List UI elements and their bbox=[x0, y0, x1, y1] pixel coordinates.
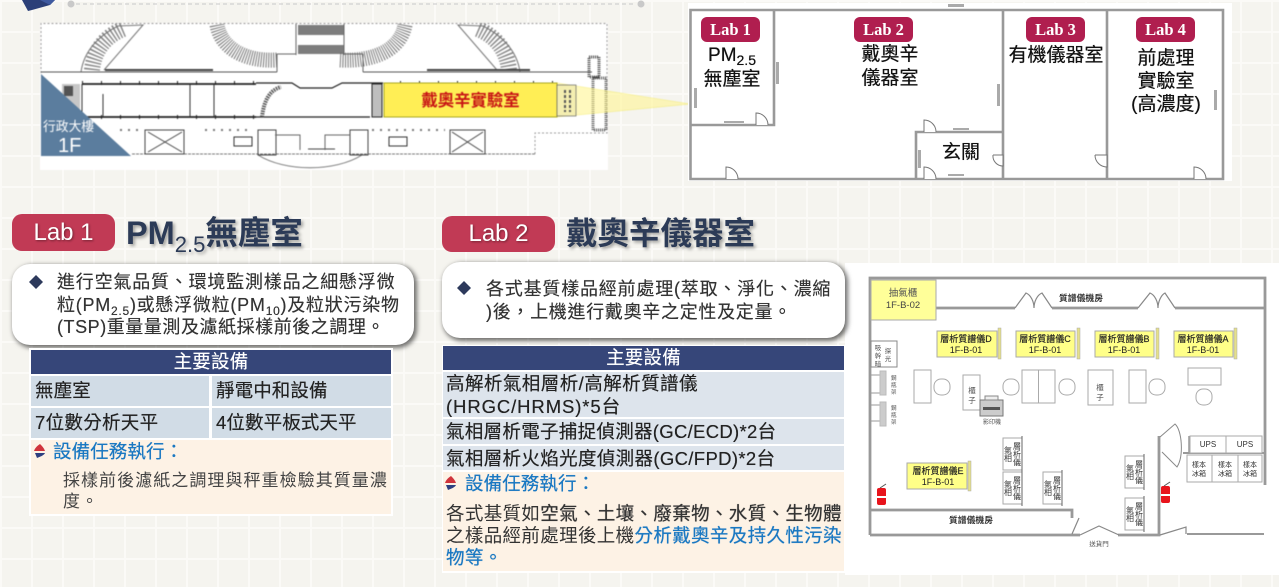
small furniture labels: 光 bbox=[885, 354, 892, 363]
sample freezers: 樣本 bbox=[1218, 460, 1232, 469]
gas chromatographs bbox=[1003, 436, 1144, 532]
lab 4 tag: Lab 4 bbox=[1145, 20, 1186, 39]
lab 1 badge: Lab 1 bbox=[33, 219, 94, 246]
sample freezers: 冰箱 bbox=[1243, 469, 1257, 478]
small furniture labels: 架 bbox=[891, 419, 897, 426]
lab 1 equipment table bbox=[29, 348, 393, 516]
printer bbox=[980, 396, 1003, 416]
task heading: 設備任務執行： bbox=[465, 473, 595, 494]
floor tag triangle: 1F bbox=[58, 135, 81, 157]
lab 1 tag: Lab 1 bbox=[710, 20, 751, 39]
small furniture labels: 子 bbox=[968, 396, 976, 405]
instrument A: 層析質譜儀A bbox=[1177, 333, 1229, 344]
task line 2: 之樣品經前處理後上機分析戴奧辛及持久性污染 bbox=[446, 525, 842, 546]
lab 1 name: PM2.5 bbox=[708, 45, 756, 68]
description line 1: 進行空氣品質、環境監測樣品之細懸浮微 bbox=[57, 272, 395, 292]
instrument E bbox=[907, 461, 971, 491]
decorative corner logo bbox=[22, 0, 55, 11]
gas chromatograph labels: 層析儀 bbox=[1052, 476, 1062, 500]
dioxin lab highlight bbox=[384, 83, 690, 117]
cell bbox=[212, 376, 391, 406]
machine room label top: 質譜儀機房 bbox=[1059, 292, 1103, 303]
small furniture labels: 幹 bbox=[875, 351, 882, 360]
lab 4 tag bbox=[1136, 17, 1195, 42]
lab 2 name bbox=[861, 44, 918, 89]
equipment row 1 bbox=[443, 372, 844, 417]
task line 1: 各式基質如空氣、土壤、廢棄物、水質、生物體 bbox=[446, 503, 842, 524]
small furniture labels: 吸 bbox=[875, 344, 882, 352]
instrument C bbox=[1016, 328, 1080, 359]
UPS units: UPS bbox=[1237, 440, 1253, 449]
gas chromatograph labels: 層析儀 bbox=[1012, 476, 1022, 500]
table header: 主要設備 bbox=[606, 347, 681, 368]
small furniture labels: 影印機 bbox=[983, 418, 1001, 426]
sample freezers bbox=[1187, 455, 1262, 482]
lab layout overview plan bbox=[688, 3, 1232, 181]
lab 1 badge bbox=[12, 214, 115, 251]
gas chromatograph labels: 氣相 bbox=[1126, 463, 1134, 481]
fume hood: 抽氣櫃 bbox=[889, 287, 918, 299]
bullet bbox=[29, 275, 43, 289]
equipment row 1: 高解析氣相層析/高解析質譜儀 bbox=[446, 373, 698, 394]
dioxin instrument room floor plan bbox=[845, 263, 1279, 575]
lab 4 name: (高濃度) bbox=[1131, 94, 1201, 115]
cell: 4位數平板式天平 bbox=[216, 412, 357, 433]
lab 2 badge bbox=[442, 216, 555, 252]
small furniture labels: 櫃 bbox=[1096, 382, 1104, 392]
lab 1 tag bbox=[701, 17, 760, 42]
gas chromatograph labels bbox=[1004, 442, 1144, 526]
lab 1 description bbox=[12, 264, 414, 345]
small furniture labels: 子 bbox=[1096, 393, 1104, 402]
section: lab 2 bbox=[440, 215, 852, 573]
small furniture labels: 瓶 bbox=[891, 381, 897, 389]
gas chromatograph labels: 氣相 bbox=[1126, 505, 1134, 523]
task text end: 度。 bbox=[63, 492, 99, 511]
description line 3: (TSP)重量量測及濾紙採樣前後之調理。 bbox=[57, 317, 385, 337]
top dotted rule bbox=[68, 0, 644, 8]
description line 1: 各式基質樣品經前處理(萃取、淨化、濃縮 bbox=[486, 279, 831, 299]
table header: 主要設備 bbox=[174, 351, 248, 372]
sample freezers: 冰箱 bbox=[1192, 469, 1206, 478]
lab 2 name: 戴奧辛 bbox=[861, 44, 918, 65]
small furniture labels: 瓶 bbox=[891, 411, 897, 419]
description line 2: 粒(PM2.5)或懸浮微粒(PM10)及粒狀污染物 bbox=[57, 295, 400, 318]
instrument B: 層析質譜儀B bbox=[1098, 333, 1150, 344]
lab 3 tag bbox=[1026, 17, 1085, 42]
small furniture labels: 櫃 bbox=[968, 385, 976, 395]
lab 2 title: 戴奧辛儀器室 bbox=[566, 215, 755, 251]
fume hood bbox=[871, 280, 936, 320]
lab 1 title: PM2.5無塵室 bbox=[126, 215, 303, 257]
equipment row 2 bbox=[443, 419, 844, 444]
table header bbox=[443, 346, 844, 370]
cell: 無塵室 bbox=[35, 380, 91, 401]
machine room label bottom: 質譜儀機房 bbox=[949, 514, 993, 525]
task heading: 設備任務執行： bbox=[53, 441, 183, 462]
furniture bbox=[871, 341, 1221, 426]
gas chromatograph labels: 氣相 bbox=[1044, 479, 1052, 497]
equipment row 1: (HRGC/HRMS)*5台 bbox=[446, 396, 621, 417]
instrument C: 1F-B-01 bbox=[1029, 345, 1061, 355]
instrument A bbox=[1174, 328, 1237, 359]
gas chromatograph labels: 層析儀 bbox=[1134, 460, 1144, 484]
lab 2 equipment table bbox=[442, 345, 846, 573]
section: lab 1 bbox=[10, 214, 420, 516]
instrument D: 層析質譜儀D bbox=[940, 333, 992, 344]
small furniture labels: 架 bbox=[891, 389, 897, 396]
cell: 靜電中和設備 bbox=[216, 380, 328, 401]
instrument E: 層析質譜儀E bbox=[912, 465, 964, 476]
task block bbox=[443, 472, 844, 571]
sample freezers: 樣本 bbox=[1192, 460, 1206, 469]
instrument D: 1F-B-01 bbox=[950, 345, 982, 355]
instrument B bbox=[1095, 328, 1159, 359]
small furniture labels: 鋼 bbox=[891, 374, 897, 382]
description line 2: )後，上機進行戴奧辛之定性及定量。 bbox=[486, 302, 792, 322]
foyer name: 玄關 bbox=[942, 142, 980, 163]
equipment row 3: 氣相層析火焰光度偵測器(GC/FPD)*2台 bbox=[446, 448, 775, 469]
icon bbox=[34, 444, 45, 458]
lab 4 name bbox=[1131, 48, 1201, 115]
instrument E: 1F-B-01 bbox=[922, 477, 954, 487]
fire extinguisher right bbox=[1161, 482, 1170, 503]
instrument C: 層析質譜儀C bbox=[1019, 333, 1071, 344]
fire extinguisher left bbox=[877, 484, 886, 505]
bullet bbox=[457, 281, 471, 295]
freight door label: 送貨門 bbox=[1089, 539, 1109, 548]
building floor plan bbox=[40, 22, 688, 170]
cell: 7位數分析天平 bbox=[35, 412, 158, 433]
gas chromatograph labels: 層析儀 bbox=[1134, 502, 1144, 526]
dioxin lab highlight: 戴奧辛實驗室 bbox=[421, 91, 520, 110]
UPS units: UPS bbox=[1200, 440, 1216, 449]
sample freezers: 樣本 bbox=[1243, 460, 1257, 469]
task line 3: 物等。 bbox=[446, 547, 503, 568]
lab 2 tag: Lab 2 bbox=[863, 20, 904, 39]
task block bbox=[31, 440, 391, 514]
small furniture labels: 暗 bbox=[875, 359, 882, 368]
lab 2 badge: Lab 2 bbox=[468, 220, 529, 247]
lab 4 name: 實驗室 bbox=[1137, 71, 1194, 92]
gas chromatograph labels: 層析儀 bbox=[1012, 442, 1022, 466]
cell bbox=[212, 408, 391, 438]
lab 3 name: 有機儀器室 bbox=[1008, 45, 1104, 66]
table header bbox=[31, 350, 391, 374]
lab 2 name: 儀器室 bbox=[861, 68, 918, 89]
equipment row 2: 氣相層析電子捕捉偵測器(GC/ECD)*2台 bbox=[446, 421, 776, 442]
lab 4 name: 前處理 bbox=[1137, 48, 1194, 69]
task text: 採樣前後濾紙之調理與秤重檢驗其質量濃 bbox=[63, 471, 388, 490]
lab 2 tag bbox=[854, 17, 913, 42]
icon bbox=[445, 476, 456, 490]
fume hood: 1F-B-02 bbox=[886, 300, 920, 311]
instrument D bbox=[937, 328, 1001, 359]
sample freezers: 冰箱 bbox=[1218, 469, 1232, 478]
instrument A: 1F-B-01 bbox=[1187, 345, 1219, 355]
instrument B: 1F-B-01 bbox=[1108, 345, 1140, 355]
cell bbox=[31, 376, 209, 406]
small furniture labels: 探 bbox=[885, 346, 892, 355]
UPS units bbox=[1190, 436, 1262, 453]
lab 1 name: 無塵室 bbox=[703, 69, 760, 90]
floor tag triangle: 行政大樓 bbox=[43, 119, 94, 134]
gas chromatograph labels: 氣相 bbox=[1004, 445, 1012, 463]
lab 1 name bbox=[703, 45, 760, 90]
small furniture labels: 鋼 bbox=[891, 404, 897, 412]
lab 3 tag: Lab 3 bbox=[1035, 20, 1076, 39]
lab 2 description bbox=[442, 262, 845, 338]
floor tag triangle bbox=[41, 74, 131, 157]
small furniture labels bbox=[875, 344, 1104, 426]
gas chromatograph labels: 氣相 bbox=[1004, 479, 1012, 497]
cell bbox=[31, 408, 209, 438]
